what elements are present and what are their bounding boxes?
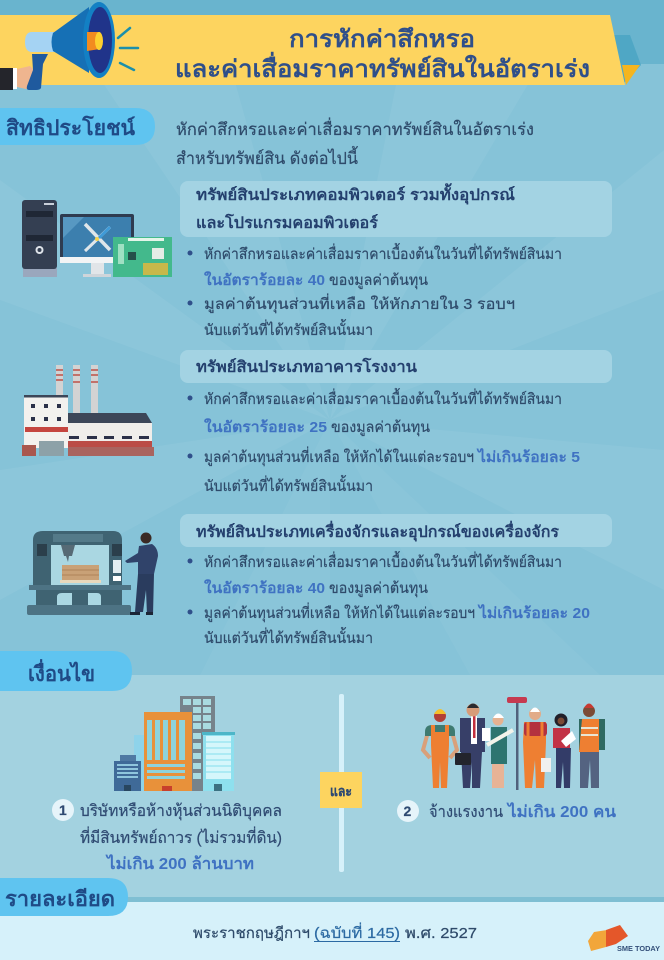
panel: conditions — [0, 651, 664, 899]
bullet list: computer assets: นับแต่วันที่ได้ทรัพย์สินนั้นมา — [204, 319, 373, 339]
icon: group of workers — [423, 697, 605, 790]
intro text: สำหรับทรัพย์สิน ดังต่อไปนี้ — [176, 146, 358, 168]
number badge 2: 2 — [404, 803, 412, 819]
number badge 1 — [52, 799, 74, 821]
bullet list: factory building assets: ของมูลค่าต้นทุน — [331, 419, 430, 437]
bullet list: machinery assets: มูลค่าต้นทุนส่วนที่เหลือ ให้หักได้ในแต่ละรอบฯ — [204, 602, 475, 623]
bullet list: computer assets: ในอัตราร้อยละ 40 — [204, 271, 325, 289]
logo: SME Today: SME TODAY — [617, 946, 660, 953]
panel: machinery assets — [180, 514, 612, 547]
panel heading: และโปรแกรมคอมพิวเตอร์ — [196, 213, 379, 232]
bullet list: computer assets — [188, 243, 562, 339]
bullet list: machinery assets: ของมูลค่าต้นทุน — [329, 580, 428, 598]
legal reference text: พ.ศ. 2527 — [405, 925, 477, 942]
bullet list: machinery assets: ในอัตราร้อยละ 40 — [204, 579, 325, 597]
bullet list: factory building assets: นับแต่วันที่ได้ทรัพย์สินนั้นมา — [204, 475, 373, 495]
bullet list: factory building assets: ในอัตราร้อยละ 25 — [204, 418, 327, 436]
intro text: หักค่าสึกหรอและค่าเสื่อมราคาทรัพย์สินในอัตราเร่ง — [176, 117, 534, 139]
panel heading: ทรัพย์สินประเภทคอมพิวเตอร์ รวมทั้งอุปกรณ์ — [196, 183, 516, 205]
condition 2 — [397, 800, 616, 822]
bullet list: machinery assets — [188, 551, 590, 647]
panel: computer assets — [180, 181, 612, 237]
bullet list: machinery assets: หักค่าสึกหรอและค่าเสื่อมราคาเบื้องต้นในวันที่ได้ทรัพย์สินมา — [204, 551, 562, 571]
panel heading: ทรัพย์สินประเภทอาคารโรงงาน — [196, 357, 417, 376]
title: และค่าเสื่อมราคาทรัพย์สินในอัตราเร่ง — [175, 51, 590, 83]
heading pill: conditions — [0, 651, 132, 691]
panel: details — [0, 878, 664, 960]
panel: factory building assets — [180, 350, 612, 383]
bullet list: computer assets: มูลค่าต้นทุนส่วนที่เหลือ ให้หักภายใน 3 รอบฯ — [204, 293, 515, 314]
icon: factory — [22, 365, 154, 456]
heading pill: benefits: สิทธิประโยชน์ — [6, 115, 136, 140]
heading pill: details — [0, 878, 128, 916]
bullet list: factory building assets: มูลค่าต้นทุนส่วนที่เหลือ ให้หักได้ในแต่ละรอบฯ — [204, 446, 474, 467]
icon: machine and operator — [27, 531, 158, 615]
number badge 1: 1 — [59, 802, 67, 818]
connector: and — [320, 772, 362, 808]
condition 1: ที่มีสินทรัพย์ถาวร (ไม่รวมที่ดิน) — [80, 826, 282, 847]
bullet list: machinery assets: ไม่เกินร้อยละ 20 — [477, 603, 590, 622]
legal reference text: (ฉบับที่ 145) — [314, 922, 400, 942]
condition 1: บริษัทหรือห้างหุ้นส่วนนิติบุคคล — [80, 802, 282, 821]
heading pill: benefits — [0, 108, 155, 145]
bullet list: machinery assets: นับแต่วันที่ได้ทรัพย์สินนั้นมา — [204, 627, 373, 647]
intro text — [176, 117, 534, 168]
header ribbon — [0, 15, 641, 85]
heading pill: conditions: เงื่อนไข — [28, 658, 95, 686]
title: การหักค่าสึกหรอ — [289, 26, 475, 53]
panel heading: ทรัพย์สินประเภทเครื่องจักรและอุปกรณ์ของเครื่องจักร — [196, 520, 560, 542]
bullet list: computer assets: ของมูลค่าต้นทุน — [329, 272, 428, 290]
icon: office buildings — [114, 696, 235, 791]
condition 2: ไม่เกิน 200 คน — [506, 802, 616, 821]
legal reference text — [193, 922, 477, 942]
bullet list: factory building assets — [188, 388, 580, 495]
title — [175, 26, 590, 83]
logo: SME Today — [588, 925, 660, 953]
bullet list: factory building assets: ไม่เกินร้อยละ 5 — [476, 447, 580, 466]
condition 1: ไม่เกิน 200 ล้านบาท — [105, 854, 254, 873]
bullet list: factory building assets: หักค่าสึกหรอและค่าเสื่อมราคาเบื้องต้นในวันที่ได้ทรัพย์สินมา — [204, 388, 562, 408]
condition 2: จ้างแรงงาน — [429, 803, 503, 821]
icon: megaphone — [0, 2, 138, 90]
condition 1 — [52, 799, 282, 873]
icon: computer set — [22, 200, 172, 277]
heading pill: details: รายละเอียด — [5, 887, 115, 911]
number badge 2 — [397, 800, 419, 822]
connector: and: และ — [330, 783, 352, 799]
panel heading — [196, 183, 516, 232]
bullet list: computer assets: หักค่าสึกหรอและค่าเสื่อมราคาเบื้องต้นในวันที่ได้ทรัพย์สินมา — [204, 243, 562, 263]
legal reference text: พระราชกฤษฎีกาฯ — [193, 925, 310, 942]
